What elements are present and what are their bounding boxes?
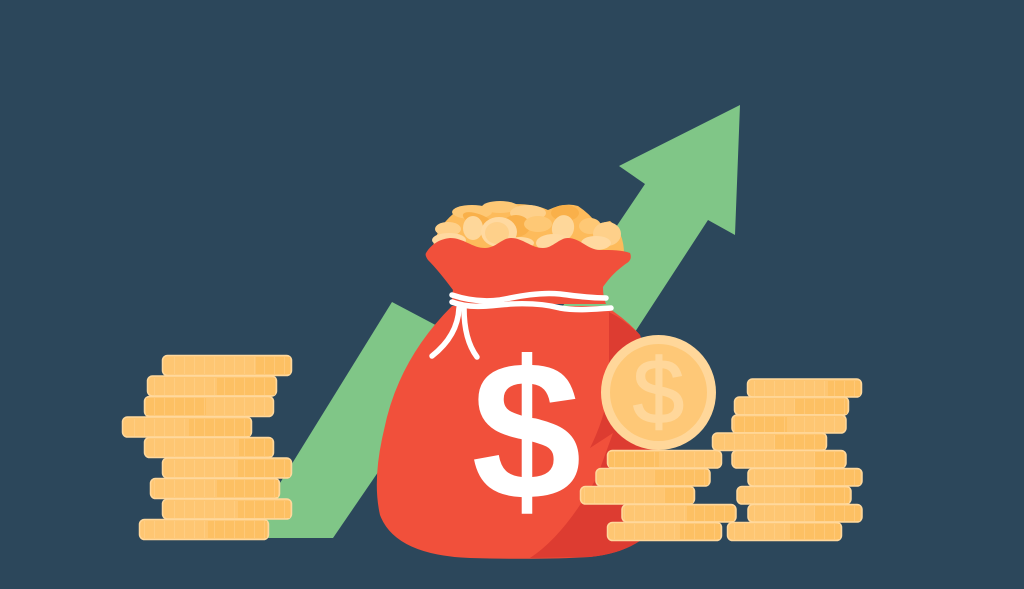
bag shadow [530,312,660,558]
dollar sign on coin: $ [633,341,684,443]
coin stack: left [122,356,292,540]
gold coin pile in bag [432,201,624,252]
bag body [377,306,660,559]
large gold coin [601,335,716,450]
money bag [377,238,660,559]
rope [432,293,611,357]
dollar sign on bag: $ [471,320,582,541]
coin stack: middle [580,450,736,540]
illustration: money bag with rising arrow [122,105,863,559]
coin stack: right [712,379,862,540]
bag ruffled neck [426,238,631,304]
arrow: green rising arrow [246,105,740,538]
